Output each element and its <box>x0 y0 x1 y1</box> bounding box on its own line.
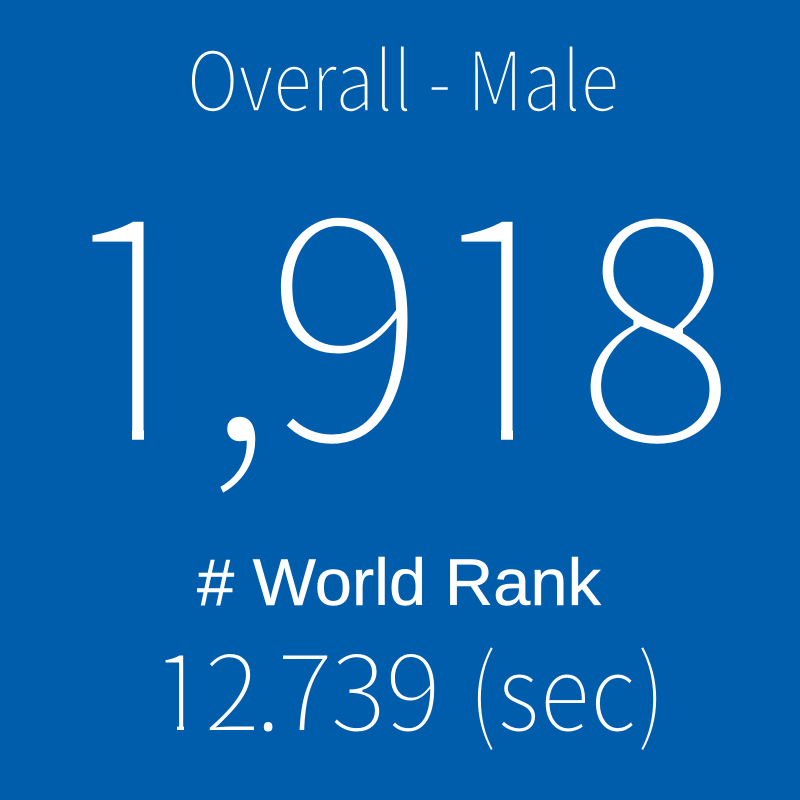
heading: Overall - Male: Overall - Male <box>187 16 619 135</box>
value: 12.739 (sec) <box>150 610 666 762</box>
big number: 1,918: 1,918 <box>50 86 738 532</box>
label: # World Rank: # World Rank <box>197 545 602 619</box>
value: 12.739 (sec): 12.739 <box>151 610 441 762</box>
value: 12.739 (sec): (sec) <box>468 610 666 762</box>
